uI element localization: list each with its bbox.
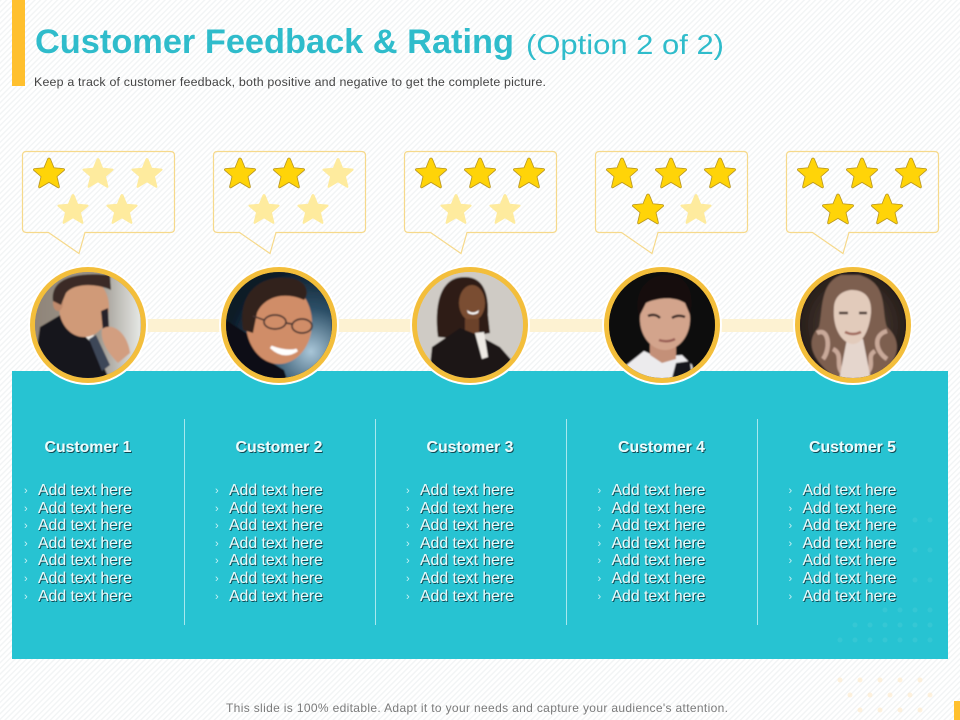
text column: customer 4: Add text here — [612, 552, 706, 569]
text column: customer 3: › — [406, 573, 410, 585]
text column: customer 1: Add text here — [38, 552, 132, 569]
text column: customer 1: › — [24, 555, 28, 567]
text column: customer 2: Add text here — [229, 552, 323, 569]
text column: customer 1: › — [24, 503, 28, 515]
text column: customer 3: › — [406, 503, 410, 515]
text column: customer 5: › — [788, 591, 792, 603]
text column: customer 1: › — [24, 573, 28, 585]
text column: customer 5: Add text here — [802, 588, 897, 605]
text column: customer 2: › — [215, 485, 219, 497]
text column: customer 4: Add text here — [612, 570, 706, 587]
text column: customer 3: Customer 3 — [427, 439, 514, 456]
text column: customer 3: › — [406, 591, 410, 603]
text column: customer 5: Add text here — [802, 482, 897, 499]
text column: customer 1: Add text here — [38, 535, 132, 552]
text column: customer 1 — [24, 439, 132, 605]
text column: customer 3: Add text here — [420, 588, 514, 605]
text column: customer 5: › — [788, 503, 792, 515]
text column: customer 1: Add text here — [38, 517, 132, 534]
text column: customer 1: › — [24, 485, 28, 497]
portrait: customer 2 — [219, 265, 339, 385]
text column: customer 5: › — [788, 485, 792, 497]
text column: customer 4: › — [598, 538, 602, 550]
text column: customer 3: Add text here — [420, 500, 514, 517]
text column: customer 3: › — [406, 485, 410, 497]
title option note: (Option 2 of 2) — [526, 29, 724, 60]
text column: customer 5: Add text here — [802, 517, 897, 534]
text column: customer 5: Add text here — [802, 552, 897, 569]
text column: customer 1: Add text here — [38, 570, 132, 587]
text column: customer 3: Add text here — [420, 570, 514, 587]
title: Customer Feedback & Rating — [35, 23, 514, 61]
decorative dots — [838, 678, 932, 712]
text column: customer 2: Add text here — [229, 570, 323, 587]
text column: customer 1: Customer 1 — [45, 439, 132, 456]
text column: customer 3: Add text here — [420, 482, 514, 499]
text column: customer 4: Add text here — [612, 482, 706, 499]
panel: rating bubble 2 — [214, 152, 366, 254]
text column: customer 2: Customer 2 — [236, 439, 323, 456]
text column: customer 2: › — [215, 503, 219, 515]
text column: customer 3: › — [406, 555, 410, 567]
panel: rating bubble 5 — [786, 152, 938, 254]
portrait: customer 1 — [28, 265, 148, 385]
text column: customer 5: › — [788, 573, 792, 585]
text column: customer 5: › — [788, 520, 792, 532]
text column: customer 3: › — [406, 538, 410, 550]
text column: customer 3: › — [406, 520, 410, 532]
corner accent — [954, 701, 960, 720]
panel: rating bubble 1 — [22, 152, 174, 254]
text column: customer 4: Add text here — [612, 500, 706, 517]
text column: customer 4: Add text here — [612, 517, 706, 534]
portrait: customer 5 — [793, 265, 913, 385]
text column: customer 3: Add text here — [420, 535, 514, 552]
footer note: This slide is 100% editable. Adapt it to your needs and capture your audience's attention. — [226, 701, 728, 715]
text column: customer 5: › — [788, 555, 792, 567]
subtitle: Keep a track of customer feedback, both positive and negative to get the complete picture. — [34, 75, 546, 89]
text column: customer 1: › — [24, 538, 28, 550]
text column: customer 1: Add text here — [38, 500, 132, 517]
text column: customer 4: › — [598, 485, 602, 497]
text column: customer 5 — [788, 439, 897, 605]
text column: customer 4: › — [598, 520, 602, 532]
text column: customer 3: Add text here — [420, 552, 514, 569]
text column: customer 2: Add text here — [229, 500, 323, 517]
text column: customer 3 — [406, 439, 514, 605]
text column: customer 4 — [598, 439, 706, 605]
panel: customer details — [12, 371, 948, 659]
text column: customer 2: › — [215, 538, 219, 550]
text column: customer 1: › — [24, 520, 28, 532]
text column: customer 4: › — [598, 591, 602, 603]
text column: customer 2: Add text here — [229, 535, 323, 552]
text column: customer 2: Add text here — [229, 588, 323, 605]
text column: customer 5: Add text here — [802, 500, 897, 517]
divider lines — [184, 419, 758, 625]
text column: customer 4: Customer 4 — [618, 439, 705, 456]
text column: customer 2 — [215, 439, 323, 605]
text column: customer 4: Add text here — [612, 535, 706, 552]
text column: customer 4: › — [598, 555, 602, 567]
text column: customer 4: Add text here — [612, 588, 706, 605]
text column: customer 2: Add text here — [229, 482, 323, 499]
portrait: customer 4 — [602, 265, 722, 385]
portrait: customer 3 — [410, 265, 530, 385]
text column: customer 2: Add text here — [229, 517, 323, 534]
text column: customer 5: › — [788, 538, 792, 550]
text column: customer 1: Add text here — [38, 588, 132, 605]
panel: rating bubble 3 — [404, 152, 556, 254]
text column: customer 3: Add text here — [420, 517, 514, 534]
connector line — [100, 319, 860, 332]
panel: rating bubble 4 — [596, 152, 748, 254]
text column: customer 5: Add text here — [802, 570, 897, 587]
text column: customer 5: Customer 5 — [809, 439, 896, 456]
text column: customer 4: › — [598, 573, 602, 585]
text column: customer 5: Add text here — [802, 535, 897, 552]
text column: customer 2: › — [215, 573, 219, 585]
title accent bar — [12, 0, 25, 86]
text column: customer 2: › — [215, 520, 219, 532]
text column: customer 2: › — [215, 555, 219, 567]
text column: customer 1: Add text here — [38, 482, 132, 499]
text column: customer 4: › — [598, 503, 602, 515]
text column: customer 1: › — [24, 591, 28, 603]
text column: customer 2: › — [215, 591, 219, 603]
